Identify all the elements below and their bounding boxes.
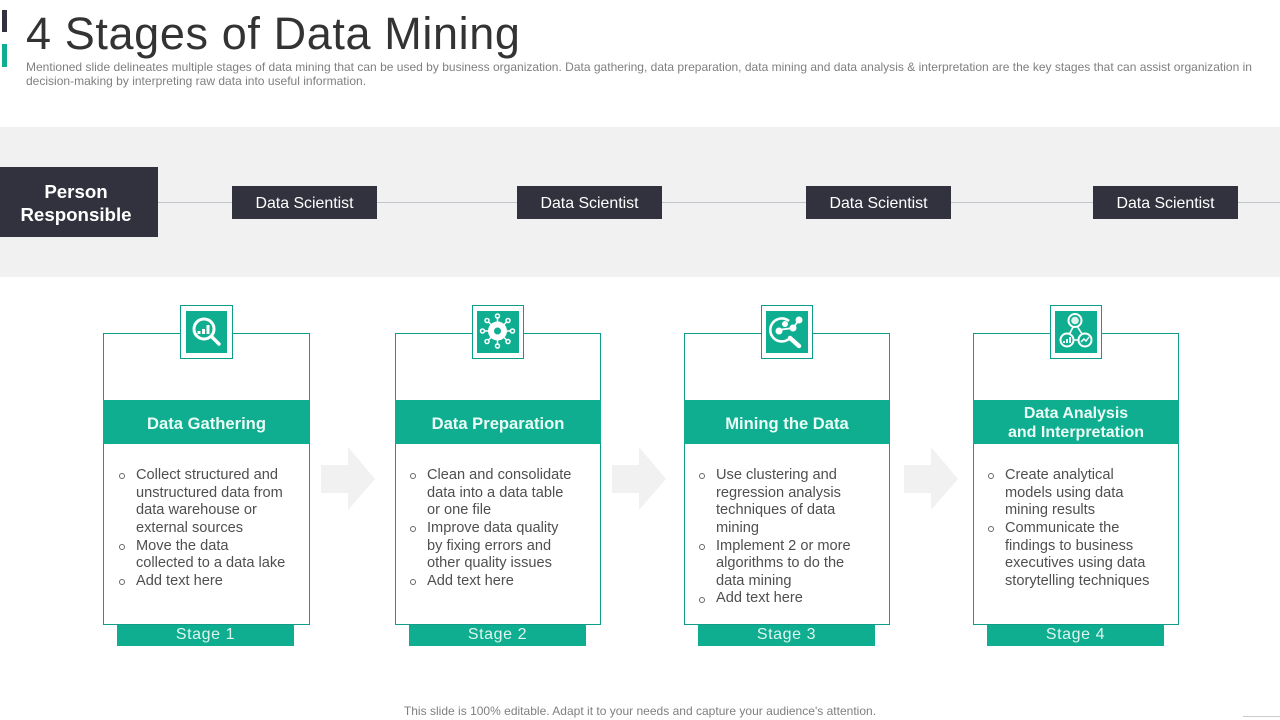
text: stage 3 bullets: techniques of data [716, 502, 835, 518]
text: stage 2 bullets: Add text here [427, 573, 514, 589]
text: stage 1 bullets: collected to a data lake [136, 555, 285, 571]
role: data scientist 2 [517, 186, 662, 219]
panel: stage 1 card [103, 333, 310, 625]
subtitle text [26, 60, 1252, 88]
title accent bars [2, 10, 7, 67]
text: stage 1 bullets: Move the data [136, 538, 228, 554]
label: stage 2: Stage 2 [468, 626, 527, 643]
text: stage 4 bullets: mining results [1005, 502, 1095, 518]
arrow 3 [904, 448, 958, 510]
label: stage 1: Stage 1 [176, 626, 235, 643]
text: stage 3 bullets: mining [716, 520, 759, 536]
subtitle text: decision-making by interpreting raw data into useful information. [26, 74, 366, 88]
role: data scientist 1 [232, 186, 377, 219]
arrow 2 [612, 448, 666, 510]
text: stage 2 bullets: other quality issues [427, 555, 552, 571]
text: stage 4 bullets: findings to business [1005, 538, 1133, 554]
text: stage 1 bullets: Add text here [136, 573, 223, 589]
heading: mining the data [684, 400, 890, 444]
label: stage 4: Stage 4 [1046, 626, 1105, 643]
icon: gear network [472, 305, 524, 359]
text: stage 1 bullets: data warehouse or [136, 502, 257, 518]
text: stage 3 bullets: Use clustering and [716, 467, 837, 483]
text: stage 4 bullets: executives using data [1005, 555, 1145, 571]
icon: magnifier with nodes [761, 305, 813, 359]
role: data scientist 3: Data Scientist [829, 195, 928, 212]
panel: person responsible band [0, 127, 1280, 277]
label: stage 1 [117, 625, 294, 646]
text: stage 1 bullets [119, 467, 285, 589]
label: person responsible: Responsible [20, 204, 132, 225]
text: stage 3 bullets: Implement 2 or more [716, 538, 851, 554]
role: data scientist 4 [1093, 186, 1238, 219]
text: stage 3 bullets: regression analysis [716, 485, 841, 501]
icon: magnifier with chart [180, 305, 233, 359]
heading: data analysis and interpretation: and Interpretation [1008, 424, 1144, 441]
arrow 1 [321, 448, 374, 510]
role: data scientist 1: Data Scientist [255, 195, 354, 212]
text: stage 3 bullets [699, 467, 851, 606]
heading: data analysis and interpretation: Data Analysis [1024, 405, 1128, 422]
text: stage 2 bullets: Clean and consolidate [427, 467, 571, 483]
text: stage 2 bullets: data into a data table [427, 485, 563, 501]
footer note: This slide is 100% editable. Adapt it to your needs and capture your audience's attention. [404, 704, 876, 718]
text: stage 2 bullets: by fixing errors and [427, 538, 551, 554]
label: stage 4 [987, 625, 1164, 646]
text: stage 1 bullets: unstructured data from [136, 485, 283, 501]
role: data scientist 2: Data Scientist [540, 195, 639, 212]
text: stage 4 bullets [988, 467, 1149, 589]
heading: data gathering: Data Gathering [147, 414, 266, 433]
label: stage 2 [409, 625, 586, 646]
panel: stage 4 card [973, 333, 1179, 625]
label: stage 3 [698, 625, 875, 646]
title: 4 Stages of Data Mining [26, 8, 521, 59]
icon: three connected charts [1050, 305, 1102, 359]
text: stage 1 bullets: Collect structured and [136, 467, 278, 483]
heading: mining the data: Mining the Data [725, 414, 849, 433]
text: stage 3 bullets: algorithms to do the [716, 555, 844, 571]
text: stage 2 bullets: or one file [427, 502, 491, 518]
heading: data preparation: Data Preparation [432, 414, 564, 433]
text: stage 4 bullets: Create analytical [1005, 467, 1114, 483]
label: stage 3: Stage 3 [757, 626, 816, 643]
text: stage 2 bullets [410, 467, 571, 589]
text: stage 4 bullets: Communicate the [1005, 520, 1119, 536]
heading: data analysis and interpretation [973, 400, 1179, 444]
text: stage 4 bullets: storytelling techniques [1005, 573, 1149, 589]
role: data scientist 3 [806, 186, 951, 219]
text: stage 1 bullets: external sources [136, 520, 243, 536]
panel: stage 3 card [684, 333, 890, 625]
subtitle text: Mentioned slide delineates multiple stages of data mining that can be used by business organization. Data gathering, data preparation, data mining and data analysis & interpretation are the key stages that can assist organization in [26, 60, 1252, 74]
label: person responsible [0, 167, 152, 237]
heading: data gathering [103, 400, 310, 444]
label: person responsible: Person [44, 181, 108, 202]
role: data scientist 4: Data Scientist [1116, 195, 1215, 212]
heading: data preparation [395, 400, 601, 444]
panel: stage 2 card [395, 333, 601, 625]
text: stage 2 bullets: Improve data quality [427, 520, 558, 536]
text: stage 3 bullets: data mining [716, 573, 791, 589]
text: stage 3 bullets: Add text here [716, 590, 803, 606]
text: stage 4 bullets: models using data [1005, 485, 1123, 501]
